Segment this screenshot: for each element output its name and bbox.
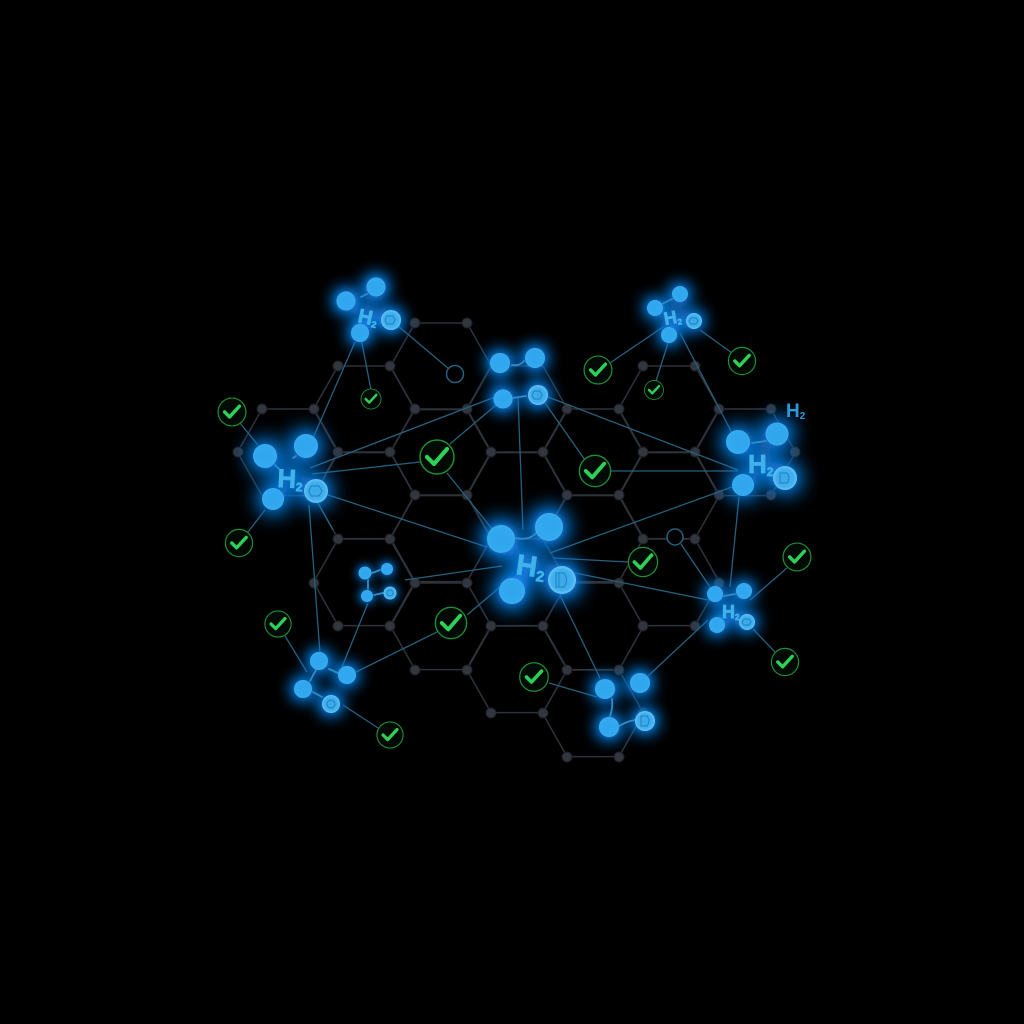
check: far left upper	[218, 398, 246, 426]
molecule: right H2: H	[748, 449, 767, 479]
molecule: left H2: H	[277, 463, 297, 494]
molecule: central H2: 2	[535, 568, 545, 586]
check: inner left	[420, 440, 454, 474]
molecule: lower right: 2	[735, 613, 740, 622]
molecule: top left: H	[356, 305, 375, 330]
molecule: bottom left	[292, 650, 358, 715]
molecule: right H2	[724, 420, 799, 498]
check: inner lower left	[435, 607, 467, 639]
check: beside center	[628, 547, 658, 577]
connection lines between molecules and checks	[240, 320, 787, 728]
molecule: top right: 2	[677, 317, 683, 327]
open circle node: upper left	[446, 366, 464, 382]
molecule: lower right: H	[722, 602, 735, 622]
molecule: central H2: H	[514, 549, 539, 584]
molecule: right H2: 2	[767, 465, 774, 479]
hexagonal grid nodes	[233, 318, 800, 762]
check: bottom left	[377, 722, 403, 748]
molecule: top center	[488, 346, 550, 411]
molecule: bottom	[593, 671, 657, 739]
molecule: top left	[334, 275, 403, 344]
check: inner right	[579, 455, 611, 487]
check: small top left	[361, 389, 381, 409]
molecule: central H2	[484, 510, 579, 607]
check: far right upper	[783, 543, 811, 571]
molecule: small center left	[358, 562, 397, 603]
molecule: top left: 2	[370, 319, 377, 330]
check: small top right	[644, 380, 664, 400]
molecule: left H2: 2	[295, 480, 303, 494]
check: far right lower	[771, 648, 799, 676]
molecule: top right: H	[662, 307, 678, 329]
label: free H2: 2	[800, 411, 806, 422]
check: bottom center	[520, 663, 548, 691]
molecule: lower right	[705, 581, 757, 635]
check: lower left	[265, 611, 291, 637]
check: top middle	[584, 356, 612, 384]
hexagonal grid lines	[238, 323, 796, 757]
check: far left lower	[225, 529, 253, 557]
molecule: left H2	[251, 432, 330, 512]
open circle node: right	[667, 529, 683, 545]
label: free H2: H	[786, 401, 800, 422]
check: top right	[728, 347, 756, 375]
molecule: top right	[645, 284, 704, 345]
